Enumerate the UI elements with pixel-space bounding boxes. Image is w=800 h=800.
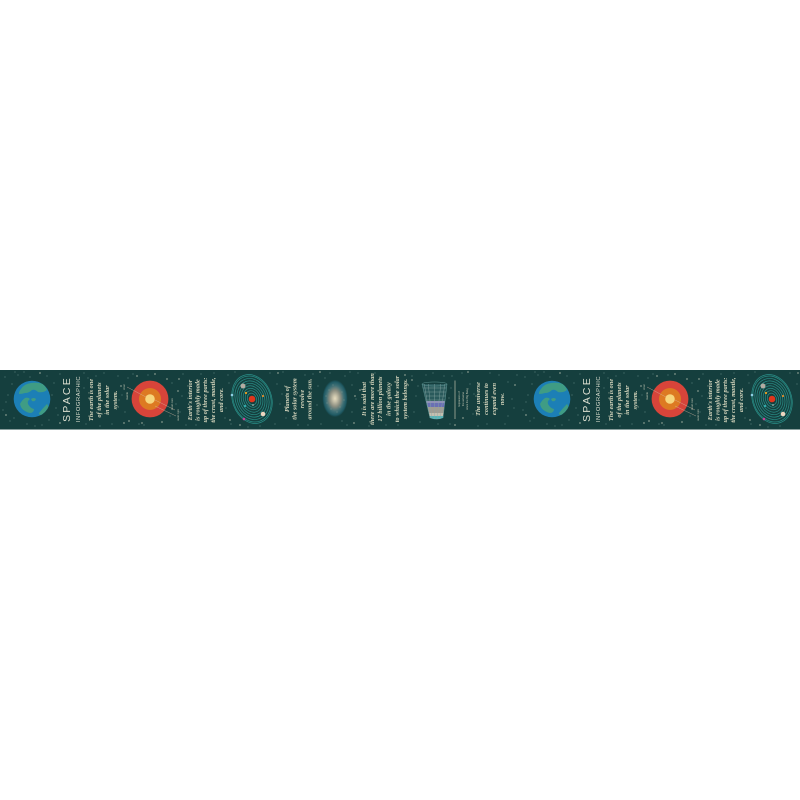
text block: earth intro: of the planets — [96, 382, 103, 418]
text block: earth intro: system. — [112, 390, 119, 410]
text block: earth interior repeat — [707, 377, 745, 423]
icon: earth — [14, 381, 50, 417]
diagram: earth interior: mantle — [125, 392, 129, 400]
icon: earth repeat — [534, 381, 570, 417]
text block: earth interior repeat: and core. — [738, 388, 745, 412]
star field — [3, 372, 798, 427]
text block: earth intro repeat — [608, 379, 639, 421]
diagram: earth interior: inner core — [170, 398, 174, 410]
title repeat: INFOGRAPHIC — [596, 376, 602, 422]
text block: earth intro repeat: in the solar — [624, 385, 631, 415]
callout text: universe expansion: since the Big Bang — [465, 388, 469, 410]
text block: galaxy: there are more than — [369, 373, 376, 425]
text block: planets: revolve — [299, 390, 306, 408]
text block: earth intro: in the solar — [104, 385, 111, 415]
text block: earth interior: up of three parts: — [202, 377, 209, 423]
diagram: earth interior repeat — [642, 381, 700, 421]
title — [61, 376, 82, 422]
text block: earth intro — [88, 379, 119, 421]
diagram: earth interior repeat: inner core — [690, 398, 694, 410]
callout line — [454, 380, 456, 419]
text block: universe: The universe — [475, 382, 482, 416]
background band — [0, 370, 800, 430]
first sequence — [14, 374, 504, 425]
text block: earth interior — [187, 377, 225, 423]
text block: galaxy: to which the solar — [394, 375, 401, 422]
text block: universe: now. — [499, 393, 506, 405]
text block: earth interior: Earth's interior — [187, 379, 194, 421]
text block: planets — [284, 378, 314, 420]
text block: earth intro repeat: of the planets — [616, 382, 623, 418]
diagram: earth interior repeat: outer core — [696, 409, 700, 421]
diagram: earth interior repeat: crust — [642, 384, 646, 390]
text block: planets: Planets of — [284, 385, 291, 412]
text block: earth interior: and core. — [218, 388, 225, 412]
diagram: solar system repeat — [745, 369, 799, 429]
text block: earth interior repeat: up of three parts: — [722, 377, 729, 423]
callout text: universe expansion: the universe — [461, 391, 465, 406]
infographic strip — [0, 370, 800, 430]
text block: universe — [475, 382, 506, 416]
text block: earth interior repeat: Earth's interior — [707, 379, 714, 421]
callout text: universe expansion: Expansion of — [457, 391, 461, 406]
text block: earth intro repeat: The earth is one — [608, 379, 615, 421]
text block: universe: continues to — [483, 383, 490, 415]
text block: planets: around the sun. — [306, 378, 314, 420]
text block: earth interior: the crust, mantle, — [210, 377, 217, 423]
text block: galaxy: in the galaxy — [386, 382, 392, 416]
text block: universe: expand even — [491, 382, 498, 415]
title: SPACE — [61, 376, 73, 422]
diagram: solar system — [225, 369, 279, 429]
title: INFOGRAPHIC — [76, 376, 82, 422]
text block: galaxy: system belongs. — [402, 378, 409, 420]
text block: earth interior repeat: the crust, mantle, — [730, 377, 737, 423]
text block: earth intro: The earth is one — [88, 379, 95, 421]
second sequence (repeat) — [534, 374, 793, 424]
illustration: galaxy — [322, 380, 348, 417]
text block: earth intro repeat: system. — [632, 390, 639, 410]
text block: galaxy — [361, 373, 409, 425]
text block: galaxy: It is said that — [361, 382, 368, 417]
text block: earth interior repeat: is roughly made — [714, 379, 722, 421]
diagram: earth interior: crust — [122, 384, 126, 390]
title repeat — [581, 376, 602, 422]
text block: planets: the solar system — [292, 378, 298, 420]
title repeat: SPACE — [581, 376, 593, 422]
text block: galaxy: 17 billion planets — [377, 376, 384, 421]
callout text: universe expansion — [457, 388, 469, 410]
diagram: expanding universe cone — [422, 382, 448, 420]
diagram: earth interior — [122, 381, 180, 421]
text block: earth interior: is roughly made — [194, 379, 202, 421]
diagram: earth interior repeat: mantle — [645, 392, 649, 400]
diagram: earth interior: outer core — [176, 409, 180, 421]
